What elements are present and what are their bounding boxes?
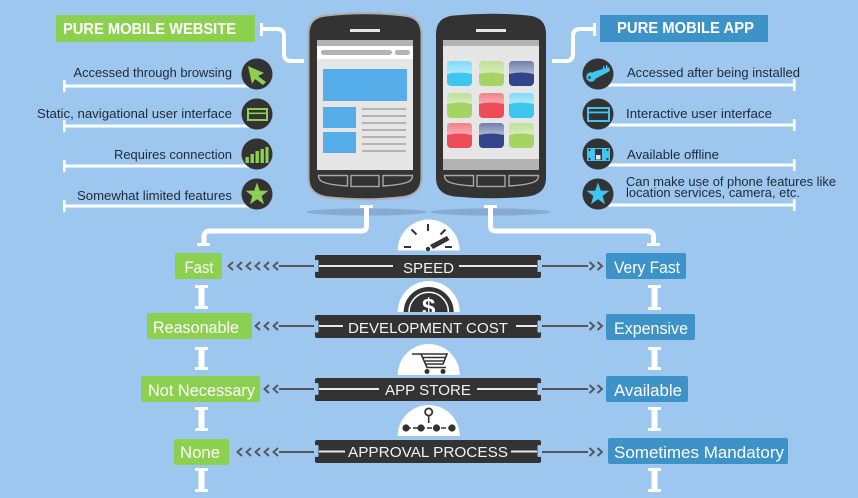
row: app store bbox=[141, 376, 688, 402]
app value: sometimes mandatory: Sometimes Mandatory bbox=[614, 443, 784, 462]
feature: available offline bbox=[582, 138, 796, 171]
website value: reasonable: Reasonable bbox=[153, 318, 239, 337]
heading: pure mobile app: PURE MOBILE APP bbox=[617, 20, 754, 37]
feature: interactive user interface bbox=[582, 98, 796, 131]
feature: requires connection bbox=[63, 138, 272, 172]
website value: none bbox=[174, 439, 229, 465]
arrow: toward very fast bbox=[542, 262, 602, 270]
label bar: app store: APP STORE bbox=[385, 382, 471, 399]
phone shadow: website bbox=[306, 208, 426, 216]
phone: mobile website bbox=[308, 13, 422, 199]
connector: app heading to phone bbox=[552, 23, 596, 61]
website value: not necessary: Not Necessary bbox=[148, 381, 255, 400]
label bar: speed: SPEED bbox=[403, 260, 454, 277]
feature: phone features: Can make use of phone features like bbox=[626, 175, 836, 189]
phone: mobile app bbox=[436, 14, 546, 198]
row: speed bbox=[175, 253, 686, 279]
feature: accessed after being installed bbox=[582, 58, 800, 91]
row: approval process bbox=[174, 438, 788, 465]
label bar: approval process: APPROVAL PROCESS bbox=[348, 444, 508, 461]
feature: somewhat limited features bbox=[63, 178, 272, 212]
feature: somewhat limited features: Somewhat limited features bbox=[77, 189, 232, 203]
label bar: development cost bbox=[315, 315, 541, 338]
arrow: toward none bbox=[238, 448, 314, 456]
panel: pure mobile app features bbox=[552, 15, 836, 211]
feature: accessed through browsing: Accessed through browsing bbox=[74, 66, 232, 80]
feature: phone features: location services, camera, etc. bbox=[626, 186, 800, 200]
icon: shopping cart bbox=[398, 344, 460, 375]
icon: approval process flow bbox=[398, 405, 460, 436]
arrow: toward not necessary bbox=[264, 385, 314, 393]
panel: pure mobile website features bbox=[37, 15, 304, 212]
app icon grid bbox=[447, 61, 534, 148]
icon: dollar coin bbox=[398, 281, 460, 312]
feature: requires connection: Requires connection bbox=[114, 148, 232, 162]
connector: app phone to comparison column bbox=[484, 205, 660, 246]
website value: fast bbox=[175, 253, 222, 279]
feature: accessed after being installed: Accessed after being installed bbox=[627, 66, 800, 80]
separators: app column bbox=[648, 285, 661, 492]
website value: none: None bbox=[180, 443, 220, 462]
heading: pure mobile website: PURE MOBILE WEBSITE bbox=[63, 21, 236, 38]
label bar: speed bbox=[315, 255, 541, 278]
feature: interactive user interface: Interactive user interface bbox=[626, 107, 772, 121]
feature: phone features bbox=[582, 175, 836, 211]
website value: not necessary bbox=[141, 376, 260, 402]
app value: very fast bbox=[606, 253, 686, 279]
arrow: toward expensive bbox=[542, 322, 602, 330]
heading: pure mobile app bbox=[600, 15, 768, 42]
app value: very fast: Very Fast bbox=[614, 258, 680, 277]
feature: available offline: Available offline bbox=[627, 148, 719, 162]
arrow: toward available bbox=[542, 385, 602, 393]
icon: dollar coin: $ bbox=[422, 294, 436, 321]
connector: website phone to comparison column bbox=[197, 205, 373, 246]
phone shadow: app bbox=[430, 208, 550, 216]
label bar: development cost: DEVELOPMENT COST bbox=[348, 320, 508, 337]
website value: reasonable bbox=[147, 313, 252, 339]
feature: static navigational interface bbox=[37, 98, 272, 132]
app value: available bbox=[606, 376, 688, 402]
label bar: app store bbox=[315, 378, 541, 401]
separators: website column bbox=[195, 285, 208, 492]
connector: website heading to phone bbox=[260, 23, 304, 61]
website value: fast: Fast bbox=[184, 258, 214, 277]
app value: available: Available bbox=[614, 381, 682, 400]
app value: expensive bbox=[606, 314, 695, 340]
row: development cost bbox=[147, 313, 695, 340]
icon: speedometer bbox=[398, 219, 460, 251]
app value: sometimes mandatory bbox=[608, 438, 788, 464]
arrow: toward sometimes mandatory bbox=[542, 448, 602, 456]
feature: static navigational interface: Static, navigational user interface bbox=[37, 107, 232, 121]
arrow: toward reasonable bbox=[256, 322, 314, 330]
heading: pure mobile website bbox=[56, 15, 255, 42]
arrow: toward fast bbox=[228, 262, 314, 270]
app value: expensive: Expensive bbox=[614, 319, 688, 338]
feature: accessed through browsing bbox=[63, 58, 272, 92]
label bar: approval process bbox=[315, 440, 541, 463]
